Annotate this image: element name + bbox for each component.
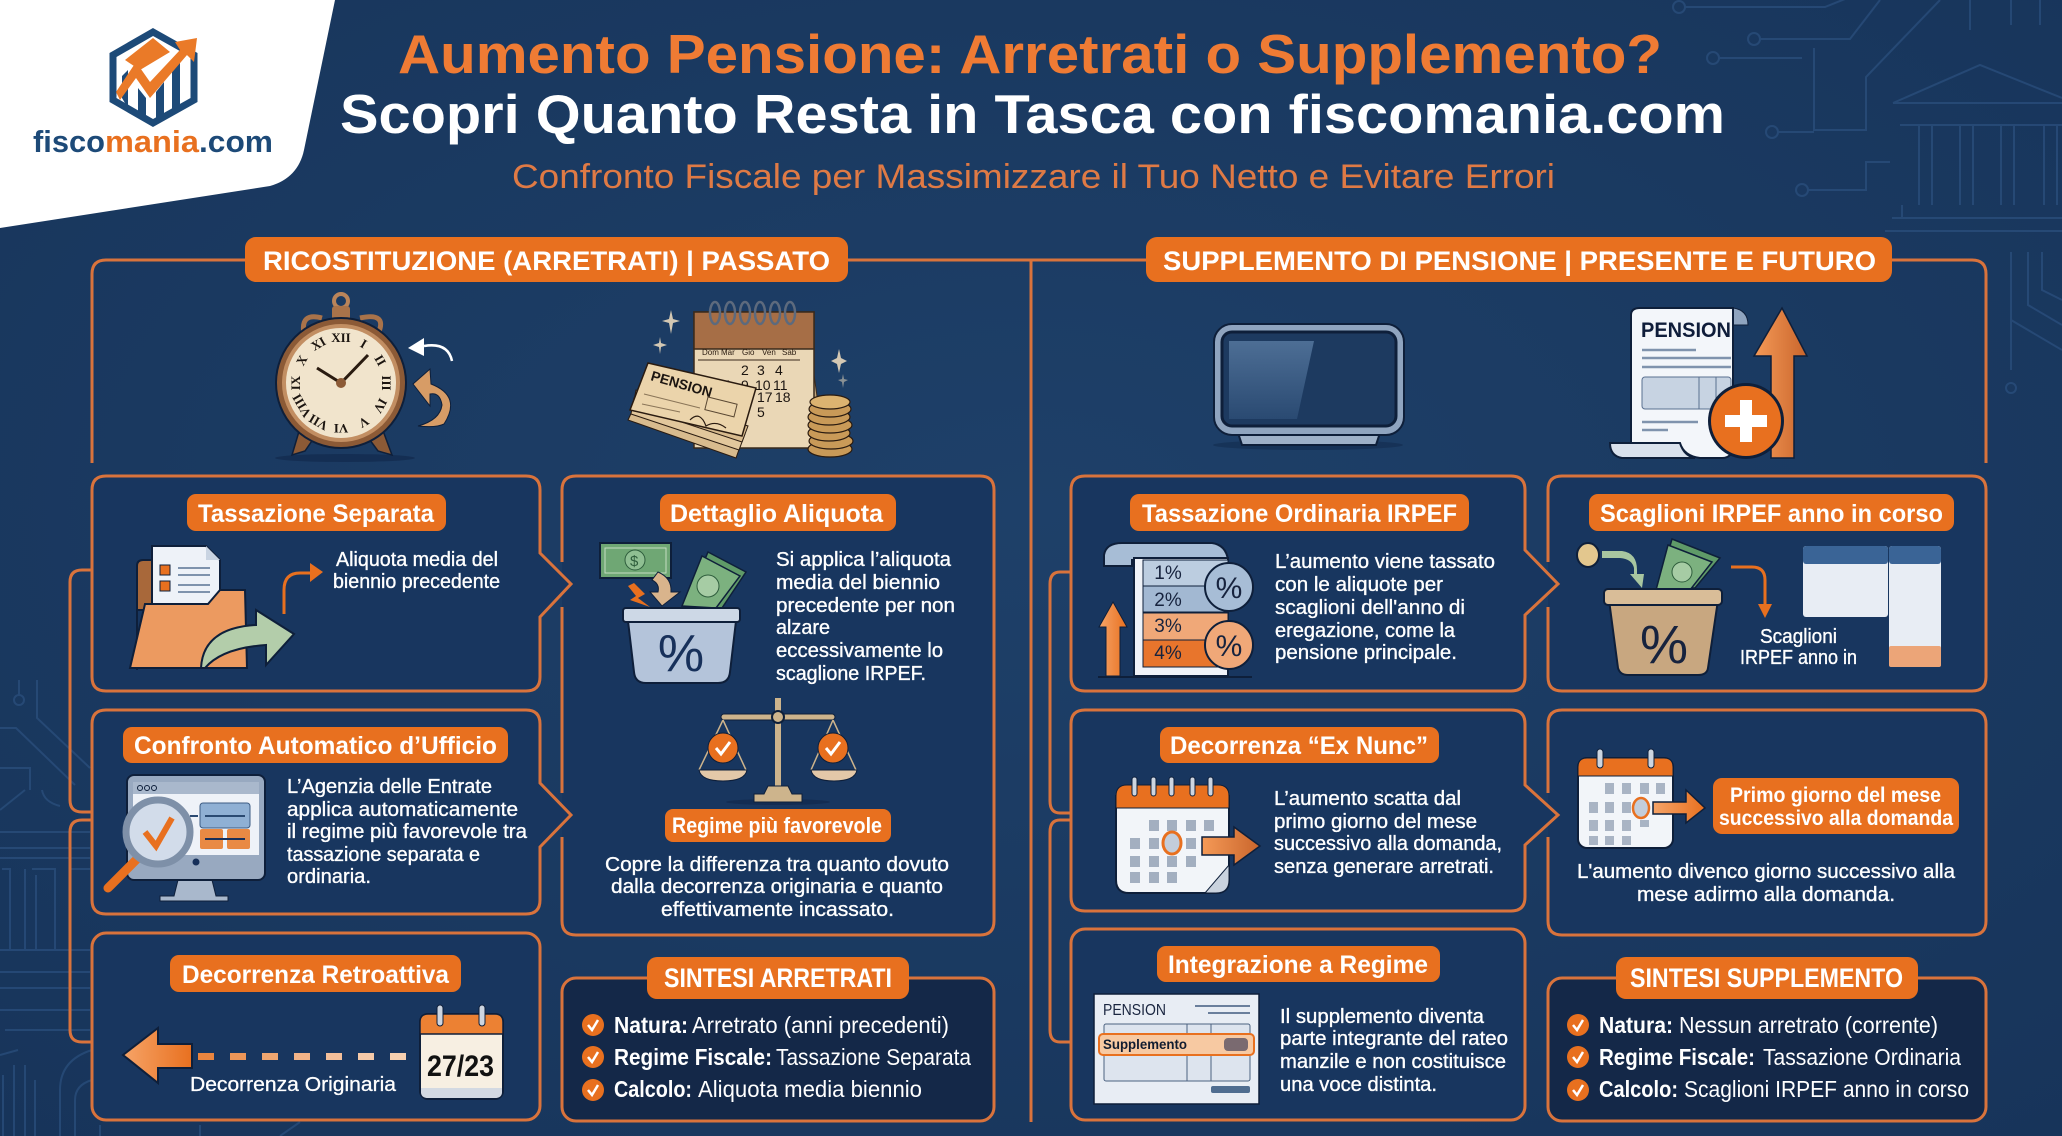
icon: percent basket: % <box>1640 615 1688 675</box>
icon: vintage clock: IX <box>288 375 303 390</box>
icon: money into percent bucket: % <box>658 625 704 683</box>
badge: Dettaglio Aliquota <box>670 500 884 528</box>
brand name <box>33 124 273 159</box>
title: Scopri Quanto Resta in Tasca con fiscomania.com <box>340 83 1725 145</box>
icon: vintage clock <box>275 294 452 462</box>
title: Aumento Pensione: Arretrati o Supplemento? <box>398 23 1662 85</box>
icon: vintage clock: VII <box>306 411 330 434</box>
text: tassazione separata e <box>287 844 480 866</box>
badge <box>647 957 909 999</box>
arrow: backward dashed <box>123 1028 406 1083</box>
text: una voce distinta. <box>1280 1074 1437 1096</box>
icon: calendar with cheques and coins: 2 <box>741 362 749 378</box>
icon: blank tablet <box>1213 324 1404 450</box>
section badge: supplemento: SUPPLEMENTO DI PENSIONE | PRESENTE E FUTURO <box>1163 246 1876 276</box>
icon: calendar with arrow <box>1578 749 1705 848</box>
label: Decorrenza Originaria <box>190 1074 397 1096</box>
icon: vintage clock: XII <box>331 330 351 345</box>
connector: right lower <box>1050 820 1071 1042</box>
panel: Scaglioni IRPEF <box>1548 476 1986 691</box>
item: calcolo: Calcolo: <box>614 1076 692 1102</box>
badge: primo giorno: Primo giorno del mese <box>1730 784 1941 807</box>
text: L'aumento divenco giorno successivo alla <box>1577 861 1956 883</box>
panel: Decorrenza Retroattiva <box>92 933 540 1120</box>
badge <box>660 494 896 531</box>
icon: calendar with cheques and coins: Mar <box>721 348 735 357</box>
text: scaglioni dell'anno di <box>1275 597 1465 619</box>
icon: percent basket <box>1577 539 1722 675</box>
icon: vintage clock: VI <box>334 421 348 436</box>
text: L’Agenzia delle Entrate <box>287 776 492 798</box>
item: natura: Arretrato (anni precedenti) <box>692 1012 949 1038</box>
item: calcolo: Aliquota media biennio <box>698 1076 922 1102</box>
icon: pension document with plus: PENSION <box>1641 319 1731 342</box>
badge: Tassazione Ordinaria IRPEF <box>1142 500 1457 528</box>
icon: balance scales <box>699 698 857 805</box>
text: manzile e non costituisce <box>1280 1051 1506 1073</box>
icon: calendar with cheques and coins <box>628 302 853 458</box>
text: aliquota: precedente per non <box>776 595 955 617</box>
connector: left upper <box>70 570 92 812</box>
section frame <box>92 260 1986 1122</box>
icon: calendar with cheques and coins: 10 <box>755 377 771 393</box>
icon: calendar with cheques and coins: 9 <box>741 377 749 393</box>
panel: Dettaglio Aliquota <box>562 476 994 935</box>
badge <box>1616 957 1918 999</box>
text: copre: Copre la differenza tra quanto dovuto <box>605 854 949 876</box>
icon: tax brackets document: 4% <box>1154 643 1182 664</box>
text: aliquota: Si applica l’aliquota <box>776 549 952 571</box>
text: biennio precedente <box>333 571 500 593</box>
text <box>1280 1006 1508 1096</box>
badge: SINTESI SUPPLEMENTO <box>1630 963 1903 993</box>
icon: calendar with cheques and coins: 4 <box>775 362 783 378</box>
text: primo giorno del mese <box>1274 811 1477 833</box>
text: copre <box>605 854 949 921</box>
icon: calendar with cheques and coins: 5 <box>757 404 765 420</box>
icon: vintage clock: I <box>358 336 370 351</box>
icon: calendar 27/23: 27/23 <box>427 1050 494 1083</box>
badge: regime <box>665 809 891 842</box>
icon: calendar 27/23 <box>420 1005 503 1099</box>
text: con le aliquote per <box>1275 574 1443 596</box>
icon: calendar with arrow <box>1116 777 1260 893</box>
panel: Decorrenza Ex Nunc <box>1071 710 1558 911</box>
item: natura <box>1567 1012 1938 1038</box>
brand name: .com <box>199 124 273 159</box>
text: aliquota <box>776 549 955 685</box>
icon: pension slip: PENSION <box>1103 1002 1166 1019</box>
text: aliquota: alzare <box>776 617 830 639</box>
subtitle: Confronto Fiscale per Massimizzare il Tuo Netto e Evitare Errori <box>512 158 1555 196</box>
icon: pension slip <box>1094 994 1259 1104</box>
item: calcolo: Scaglioni IRPEF anno in corso <box>1684 1076 1969 1102</box>
text: copre: dalla decorrenza originaria e quanto <box>611 876 943 898</box>
item: natura <box>582 1012 949 1038</box>
panel: Confronto Automatico <box>92 710 571 914</box>
icon: tax brackets document: % <box>1216 572 1242 605</box>
item: regime <box>582 1044 971 1070</box>
badge: regime: Regime più favorevole <box>672 813 882 838</box>
icon: calendar with cheques and coins: 18 <box>775 389 791 405</box>
text <box>1275 551 1495 664</box>
panel: Tassazione Ordinaria <box>1071 476 1558 691</box>
list <box>582 1012 971 1102</box>
item: regime: Tassazione Ordinaria <box>1763 1044 1961 1070</box>
section badge: arretrati <box>245 237 848 282</box>
list <box>1567 1012 1969 1102</box>
badge: Decorrenza “Ex Nunc” <box>1170 732 1428 760</box>
icon: money into percent bucket <box>600 543 746 683</box>
panel: Sintesi Arretrati <box>562 957 994 1121</box>
icon: monitor with magnifier <box>108 775 265 901</box>
item: calcolo <box>582 1076 922 1102</box>
icon: vintage clock: XI <box>308 333 328 354</box>
badge: primo giorno <box>1713 778 1959 834</box>
label: Scaglioni <box>1760 626 1837 648</box>
label <box>1740 626 1857 669</box>
icon: logo hexagon <box>113 32 197 123</box>
logo <box>0 0 335 228</box>
badge: Tassazione Separata <box>198 500 435 528</box>
panel: Sintesi Supplemento <box>1548 957 1986 1121</box>
text: parte integrante del rateo <box>1280 1028 1508 1050</box>
text: mese adirmo alla domanda. <box>1637 884 1895 906</box>
text <box>287 776 528 888</box>
text: L’aumento scatta dal <box>1274 788 1461 810</box>
icon: calendar with cheques and coins: PENSION <box>649 368 714 400</box>
item: regime: Regime Fiscale: <box>1599 1044 1755 1070</box>
text: successivo alla domanda, <box>1274 833 1502 855</box>
icon: vintage clock: II <box>371 352 389 368</box>
text: il regime più favorevole tra <box>287 821 528 843</box>
table <box>1803 546 1941 667</box>
icon: tax brackets document: % <box>1216 630 1242 663</box>
badge: Scaglioni IRPEF anno in corso <box>1600 500 1943 528</box>
text: aliquota: media del biennio <box>776 572 940 594</box>
brand name: mania <box>105 124 200 159</box>
icon: vintage clock: VIII <box>289 391 314 420</box>
text: pensione principale. <box>1275 642 1457 664</box>
icon: vintage clock: V <box>355 414 372 432</box>
badge: Confronto Automatico d’Ufficio <box>134 732 497 760</box>
icon: calendar with cheques and coins: 6 <box>705 377 713 393</box>
section badge: supplemento <box>1146 237 1892 282</box>
icon: calendar with cheques and coins: Sab <box>782 348 797 357</box>
arrow: to aliquota <box>284 573 310 614</box>
arrow: down to label <box>1731 567 1772 618</box>
icon: tax brackets document: 1% <box>1154 563 1182 584</box>
connector: left lower <box>70 820 92 1042</box>
text: Aliquota media del <box>336 549 498 571</box>
title <box>340 23 1725 145</box>
panel: Integrazione a Regime <box>1071 929 1525 1120</box>
icon: calendar with cheques and coins: Ven <box>762 348 776 357</box>
text: aliquota: eccessivamente lo <box>776 640 943 662</box>
icon: calendar with cheques and coins: 7 <box>722 377 730 393</box>
text <box>1577 861 1956 906</box>
icon: pension document with plus <box>1610 308 1807 459</box>
item: natura: Natura: <box>614 1012 688 1038</box>
badge: primo giorno: successivo alla domanda <box>1719 807 1953 830</box>
icon: calendar with cheques and coins: 3 <box>757 362 765 378</box>
text: aliquota: scaglione IRPEF. <box>776 663 926 685</box>
icon: vintage clock: III <box>379 375 394 391</box>
brand name: fisco <box>33 124 105 159</box>
icon: calendar with cheques and coins: 11 <box>773 377 788 393</box>
text <box>333 549 500 593</box>
text: senza generare arretrati. <box>1274 856 1494 878</box>
panel: Tassazione Separata <box>92 476 571 691</box>
label: IRPEF anno in <box>1740 647 1857 669</box>
icon: vintage clock: IV <box>370 396 391 416</box>
text: Il supplemento diventa <box>1280 1006 1485 1028</box>
item: calcolo: Calcolo: <box>1599 1076 1678 1102</box>
icon: calendar with cheques and coins: Gio <box>742 348 755 357</box>
icon: tax brackets document: 3% <box>1154 616 1182 637</box>
icon: pension slip: Supplemento <box>1103 1036 1187 1052</box>
text: applica automaticamente <box>287 799 518 821</box>
icon: calendar with cheques and coins: 17 <box>757 389 773 405</box>
section badge: arretrati: RICOSTITUZIONE (ARRETRATI) | PASSATO <box>263 246 830 276</box>
icon: vintage clock: X <box>293 352 311 368</box>
icon: folder with document <box>130 546 294 670</box>
icon: money into percent bucket: $ <box>630 553 639 570</box>
item: calcolo <box>1567 1076 1969 1102</box>
item: natura: Natura: <box>1599 1012 1673 1038</box>
item: regime: Tassazione Separata <box>776 1044 971 1070</box>
text: ordinaria. <box>287 866 371 888</box>
text: L’aumento viene tassato <box>1275 551 1495 573</box>
text: eregazione, come la <box>1275 620 1456 642</box>
icon: tax brackets document: 2% <box>1154 590 1182 611</box>
badge: Integrazione a Regime <box>1168 951 1428 979</box>
badge: Decorrenza Retroattiva <box>182 961 450 989</box>
item: regime <box>1567 1044 1961 1070</box>
panel: Primo giorno <box>1548 710 1986 935</box>
item: natura: Nessun arretrato (corrente) <box>1679 1012 1938 1038</box>
icon: tax brackets document <box>1098 543 1253 677</box>
text: copre: effettivamente incassato. <box>661 899 894 921</box>
badge: SINTESI ARRETRATI <box>664 963 892 993</box>
text <box>1274 788 1502 878</box>
icon: calendar with cheques and coins: Dom <box>702 348 719 357</box>
item: regime: Regime Fiscale: <box>614 1044 772 1070</box>
connector: right upper <box>1050 572 1071 813</box>
